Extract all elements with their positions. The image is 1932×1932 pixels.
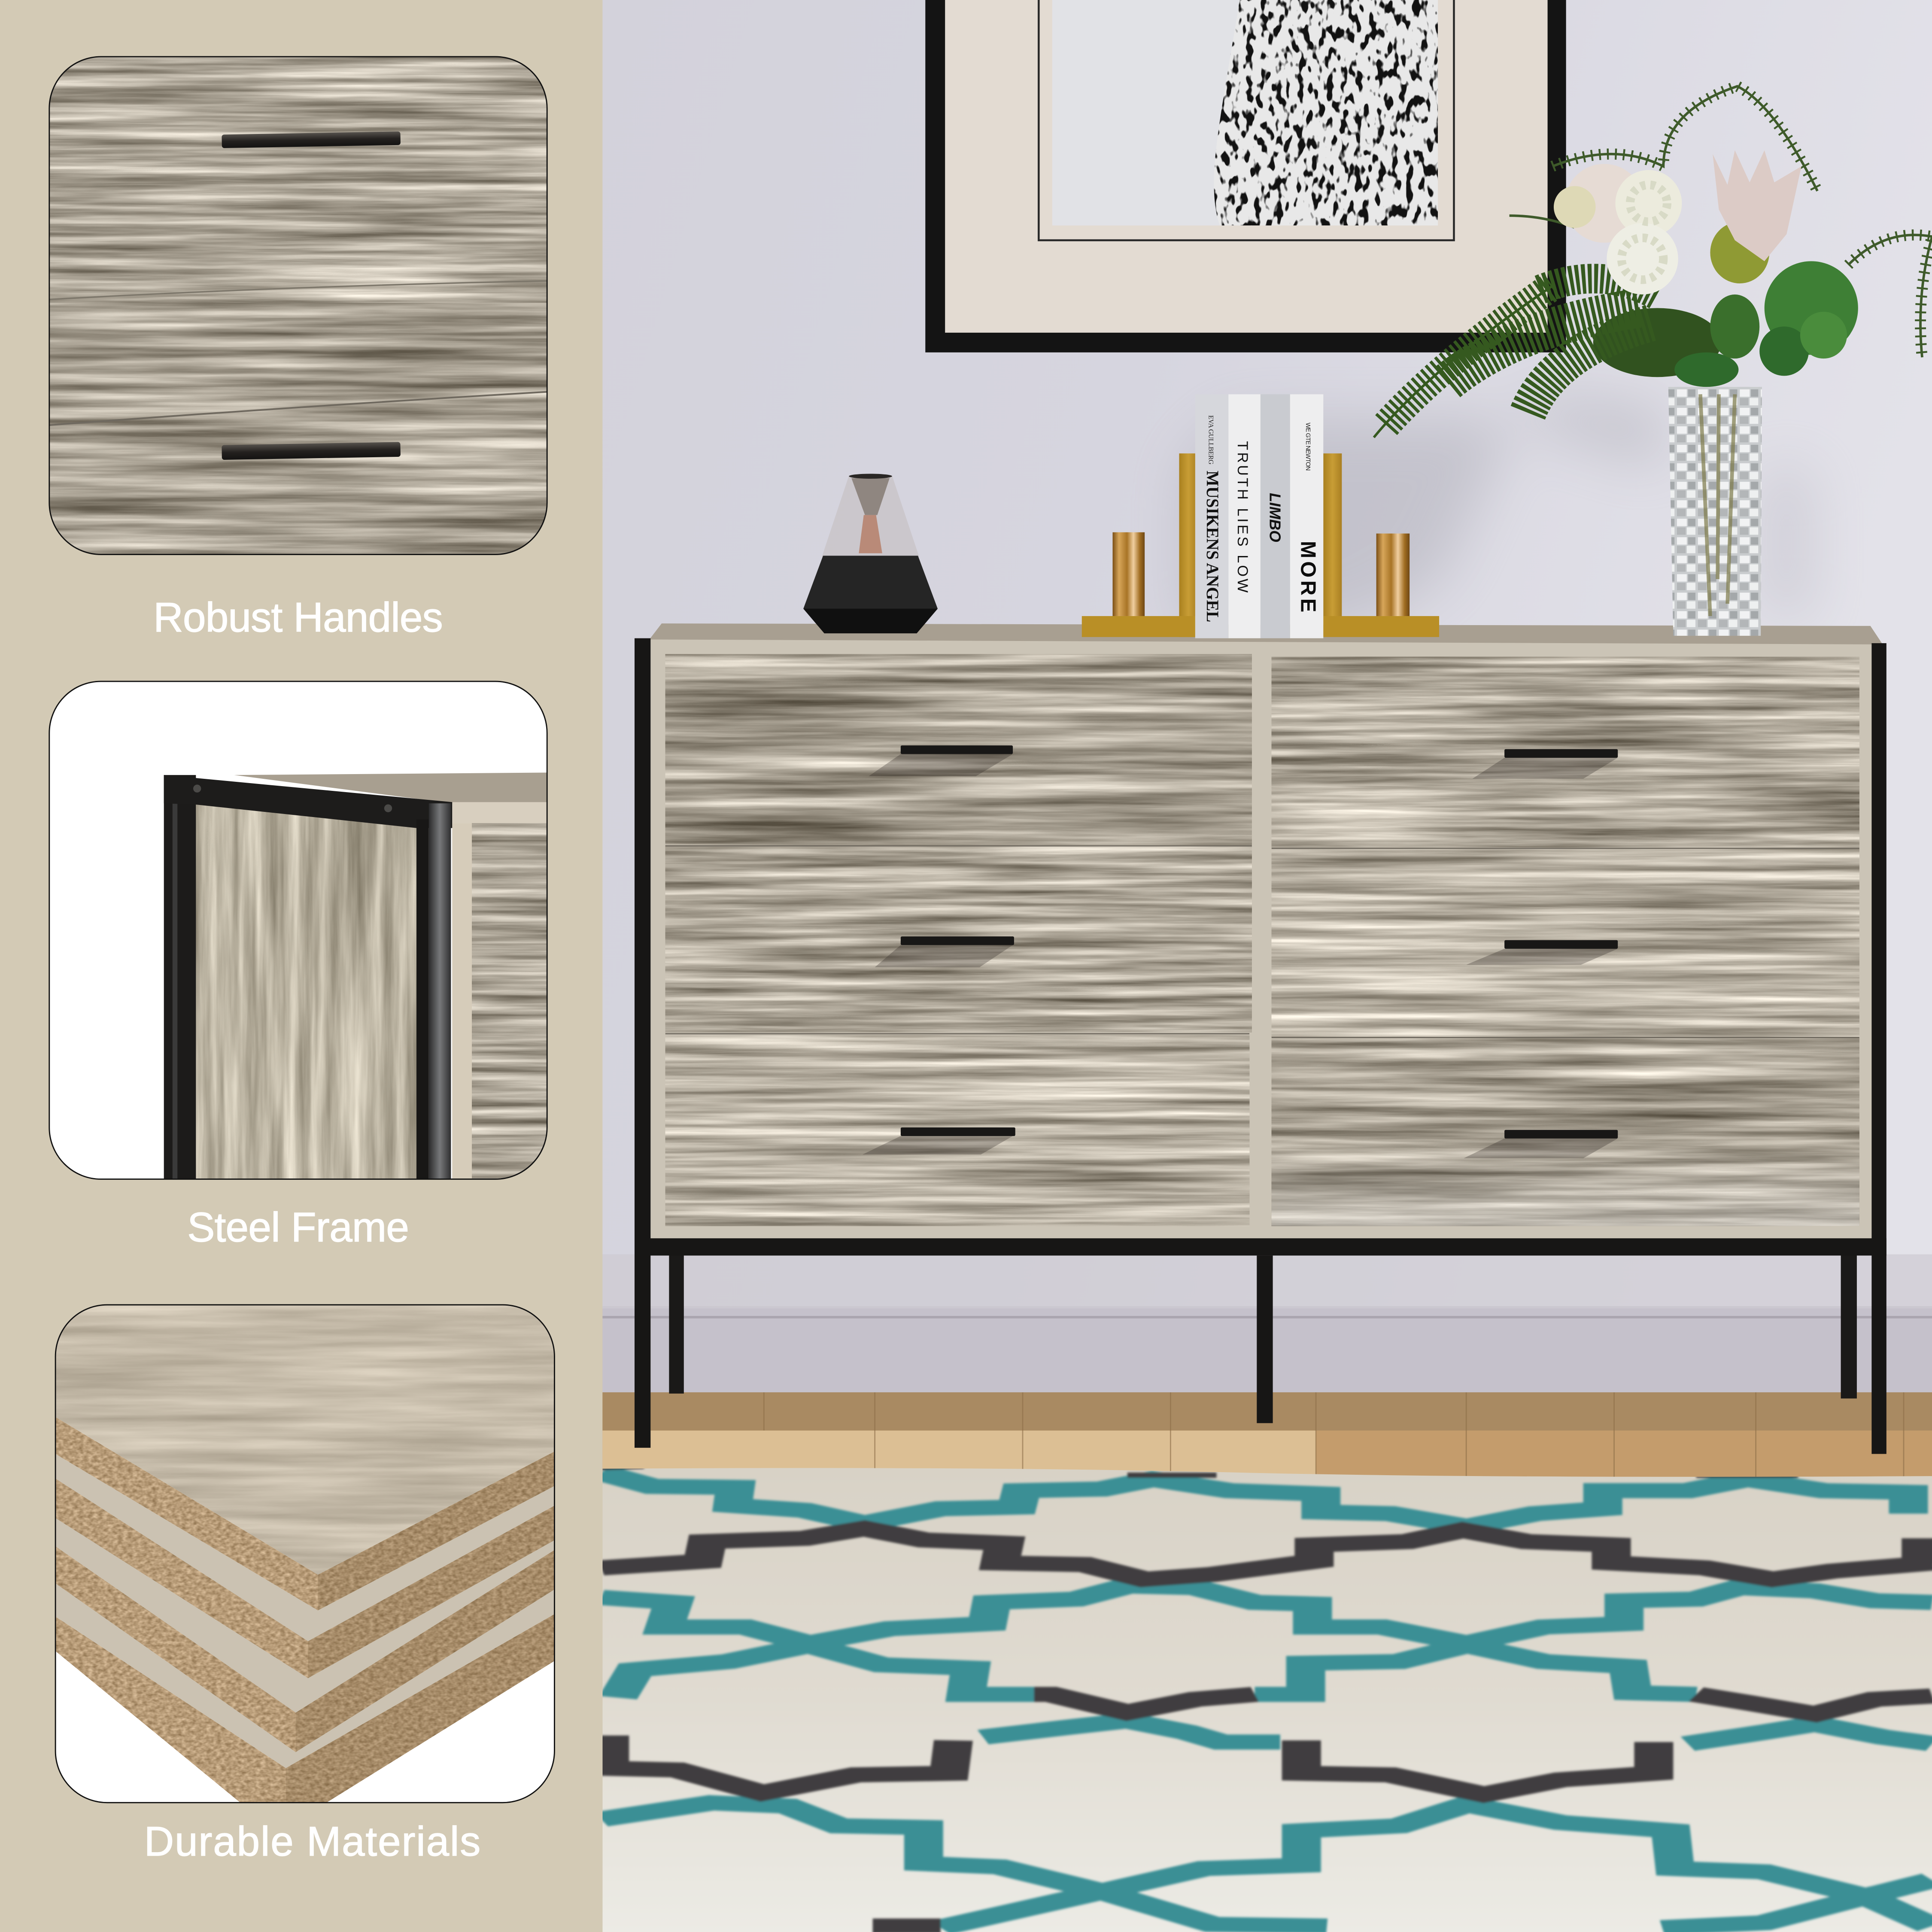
books: [1195, 394, 1323, 638]
leaves: [1674, 261, 1858, 387]
background: sidebar: [0, 0, 602, 1932]
book: Musikens Angel: MUSIKENS ANGEL: [1203, 471, 1222, 622]
book: Truth Lies Low: [1228, 394, 1261, 638]
rug: [601, 1464, 1932, 1932]
diffuser: [803, 474, 938, 633]
book: Musikens Angel: EVA GULLBERG: [1207, 415, 1214, 465]
branch leaflets: [1552, 86, 1932, 357]
drawer seams: [665, 846, 1859, 1037]
drawer: lower right: [1272, 1037, 1859, 1226]
book: Limbo: [1261, 394, 1290, 638]
book: Limbo: LIMBO: [1266, 493, 1283, 542]
framed picture: [925, 0, 1566, 352]
floor: [602, 1392, 1932, 1479]
cabinet top: [649, 623, 1883, 644]
drawer: middle left: [665, 845, 1252, 1033]
cabinet body: [650, 638, 1871, 1239]
drawer handles: [901, 745, 1618, 1139]
book: More: WE GTE NEWTON: [1304, 422, 1311, 471]
drawer: upper right: [1272, 657, 1859, 848]
label: robust handles: Robust Handles: [153, 595, 443, 641]
bookends: [1082, 453, 1439, 637]
baseboard: [602, 1255, 1932, 1395]
ferns: [1374, 279, 1657, 437]
dresser: [635, 623, 1886, 1454]
bouquet: [1374, 86, 1932, 437]
panel: robust handles: [49, 57, 547, 554]
steel frame: [635, 638, 1886, 1454]
book: More: MORE: [1297, 541, 1320, 612]
fern mass: [1593, 308, 1721, 377]
wall shadows: [1183, 394, 1811, 629]
book: Musikens Angel: [1195, 394, 1228, 638]
label: durable materials: Durable Materials: [144, 1819, 480, 1865]
drawer shadows: [863, 754, 1618, 1158]
drawer: middle right: [1272, 848, 1859, 1037]
panel: steel frame: [49, 681, 547, 1179]
flowers: [1554, 150, 1801, 295]
book: Truth Lies Low: TRUTH LIES LOW: [1234, 441, 1251, 593]
panel: durable materials: [55, 1305, 554, 1803]
back legs: [669, 1251, 1857, 1398]
vase: [1668, 387, 1762, 636]
thin branches: [1510, 86, 1932, 357]
wall: [602, 0, 1932, 1309]
book: More: [1290, 394, 1323, 638]
label: steel frame: Steel Frame: [187, 1204, 409, 1250]
sunlight on lower drawers: [1272, 1146, 1859, 1226]
drawer: upper left: [665, 654, 1252, 845]
drawer: lower left: [665, 1035, 1249, 1226]
